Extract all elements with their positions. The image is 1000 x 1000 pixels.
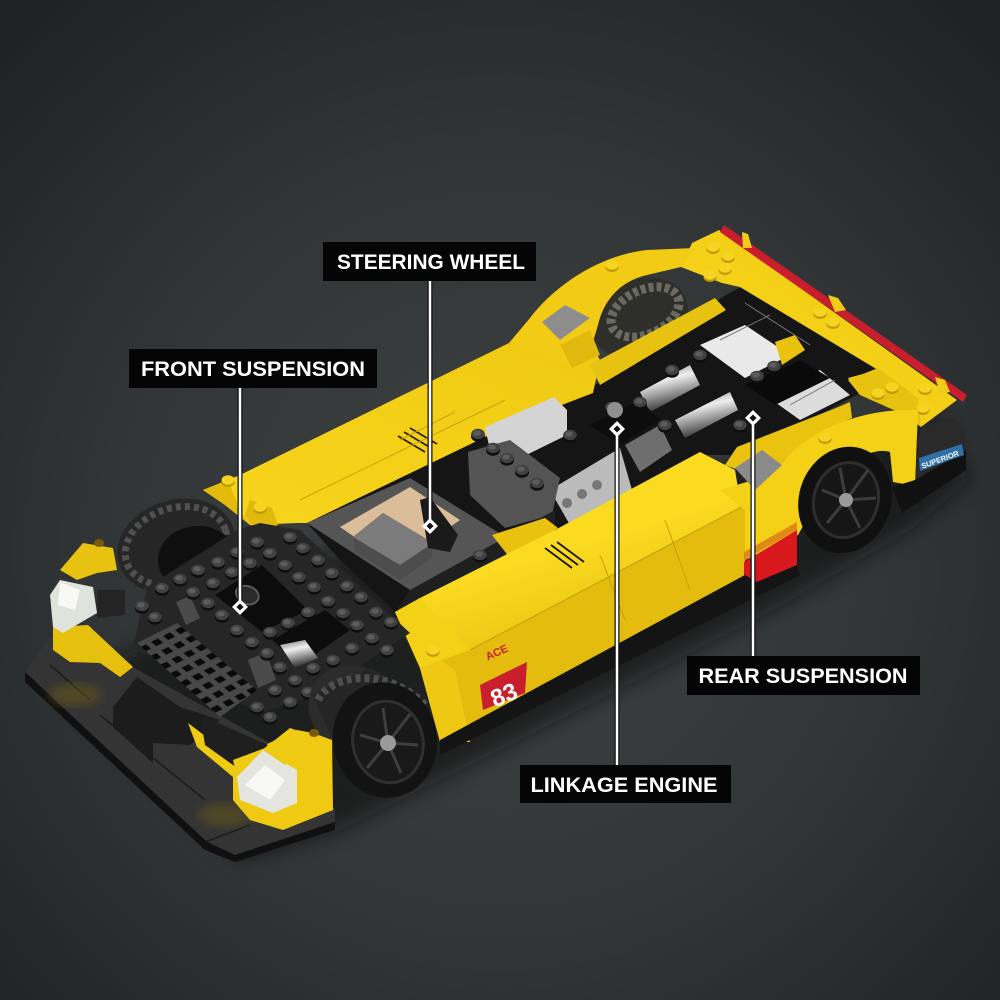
callout: linkage engine: LINKAGE ENGINE bbox=[530, 773, 718, 797]
callout: steering wheel bbox=[323, 242, 536, 534]
right front nose bbox=[188, 715, 333, 830]
front splitter bbox=[25, 637, 335, 862]
far rear arch bbox=[509, 248, 726, 385]
near rear fender bbox=[720, 402, 918, 560]
rear bay panels bbox=[700, 303, 850, 420]
callout: front suspension: FRONT SUSPENSION bbox=[141, 357, 365, 381]
lower sill bbox=[440, 565, 800, 755]
front grille bbox=[137, 623, 257, 717]
callout: linkage engine bbox=[520, 421, 731, 803]
centre front fin bbox=[113, 677, 220, 763]
ground shadow bbox=[60, 420, 970, 860]
left front nose bbox=[50, 539, 133, 677]
red wing stripe bbox=[720, 225, 967, 402]
cockpit seat and floor bbox=[307, 478, 558, 612]
race number decal: ACE bbox=[484, 643, 510, 663]
engine bay floor bbox=[307, 285, 880, 612]
race car model bbox=[25, 225, 967, 862]
engine bbox=[468, 350, 747, 528]
callout: front suspension bbox=[129, 349, 377, 615]
front stud plate bbox=[133, 523, 410, 713]
far front wheel bbox=[105, 484, 247, 608]
rear black panel bbox=[892, 417, 966, 513]
race number decal bbox=[480, 643, 527, 713]
rear black panel: SUPERIOR bbox=[920, 449, 961, 471]
far pontoon bbox=[203, 343, 600, 532]
rear wing deck bbox=[681, 230, 957, 427]
callout: steering wheel: STEERING WHEEL bbox=[337, 250, 525, 274]
plate studs bbox=[135, 532, 398, 725]
callout: rear suspension bbox=[687, 410, 920, 695]
near front wheel bbox=[290, 646, 448, 808]
callout: rear suspension: REAR SUSPENSION bbox=[698, 664, 908, 688]
race number decal: 83 bbox=[487, 678, 522, 713]
far rear wheel bbox=[579, 262, 701, 374]
near pontoon bbox=[395, 452, 745, 742]
near rear wheel bbox=[785, 434, 905, 566]
red side stripes bbox=[744, 522, 797, 582]
